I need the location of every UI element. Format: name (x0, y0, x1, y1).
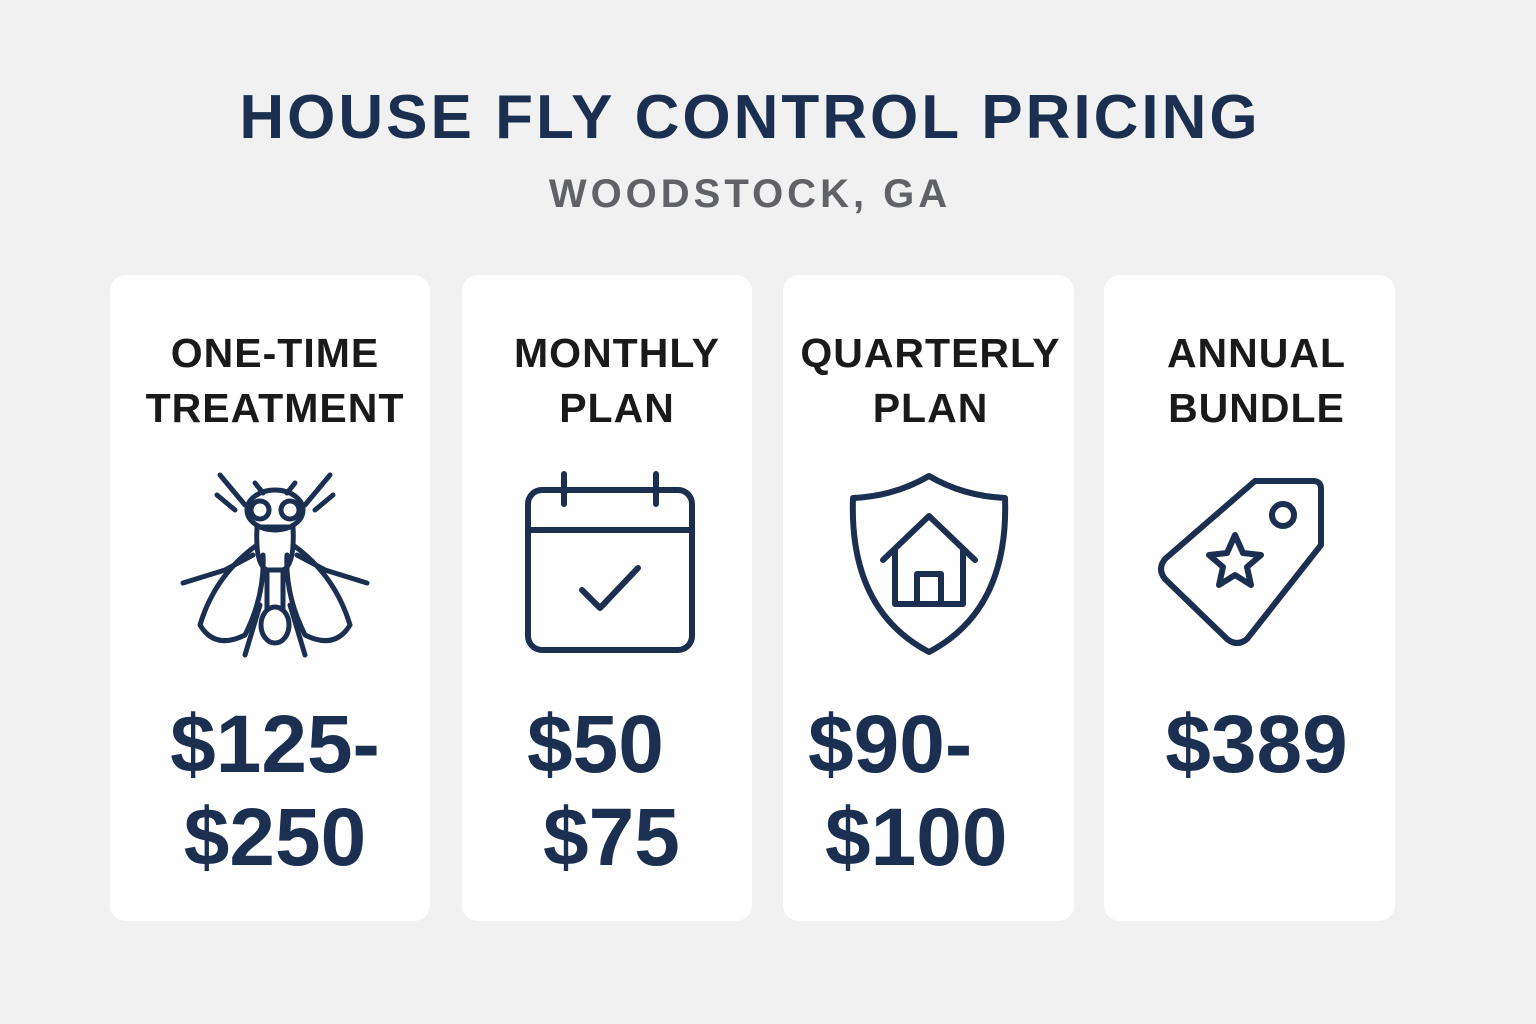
icon: fly (180, 472, 370, 658)
heading: annual (1167, 330, 1346, 431)
price: monthly (527, 699, 680, 883)
price: quarterly (808, 699, 1007, 883)
price: one-time: $125- (170, 699, 380, 790)
panel: quarterly (783, 275, 1074, 921)
icon: calendar (525, 471, 695, 653)
price: monthly: $75 (543, 792, 680, 883)
price: one-time: $250 (184, 792, 366, 883)
heading: quarterly: PLAN (873, 385, 988, 431)
heading: quarterly (800, 330, 1061, 431)
price: quarterly: $100 (825, 792, 1007, 883)
panel: one-time (110, 275, 430, 921)
heading: one-time (146, 330, 404, 431)
heading: annual: ANNUAL (1167, 330, 1346, 376)
panel: annual (1104, 275, 1395, 921)
icon: price tag (1158, 478, 1324, 646)
price: quarterly: $90- (808, 699, 972, 790)
icon: shield house (850, 473, 1008, 655)
title: HOUSE FLY CONTROL PRICING (239, 83, 1261, 152)
panel: monthly (462, 275, 752, 921)
heading: annual: BUNDLE (1168, 385, 1345, 431)
subtitle: WOODSTOCK, GA (549, 172, 951, 216)
price: monthly: $50 (527, 699, 664, 790)
heading: one-time: ONE-TIME (171, 330, 379, 376)
heading: monthly: MONTHLY (514, 330, 720, 376)
heading: one-time: TREATMENT (146, 385, 404, 431)
price: one-time (170, 699, 380, 883)
heading: monthly (514, 330, 720, 431)
heading: quarterly: QUARTERLY (800, 330, 1061, 376)
heading: monthly: PLAN (559, 385, 675, 431)
price: annual: $389 (1165, 699, 1348, 790)
